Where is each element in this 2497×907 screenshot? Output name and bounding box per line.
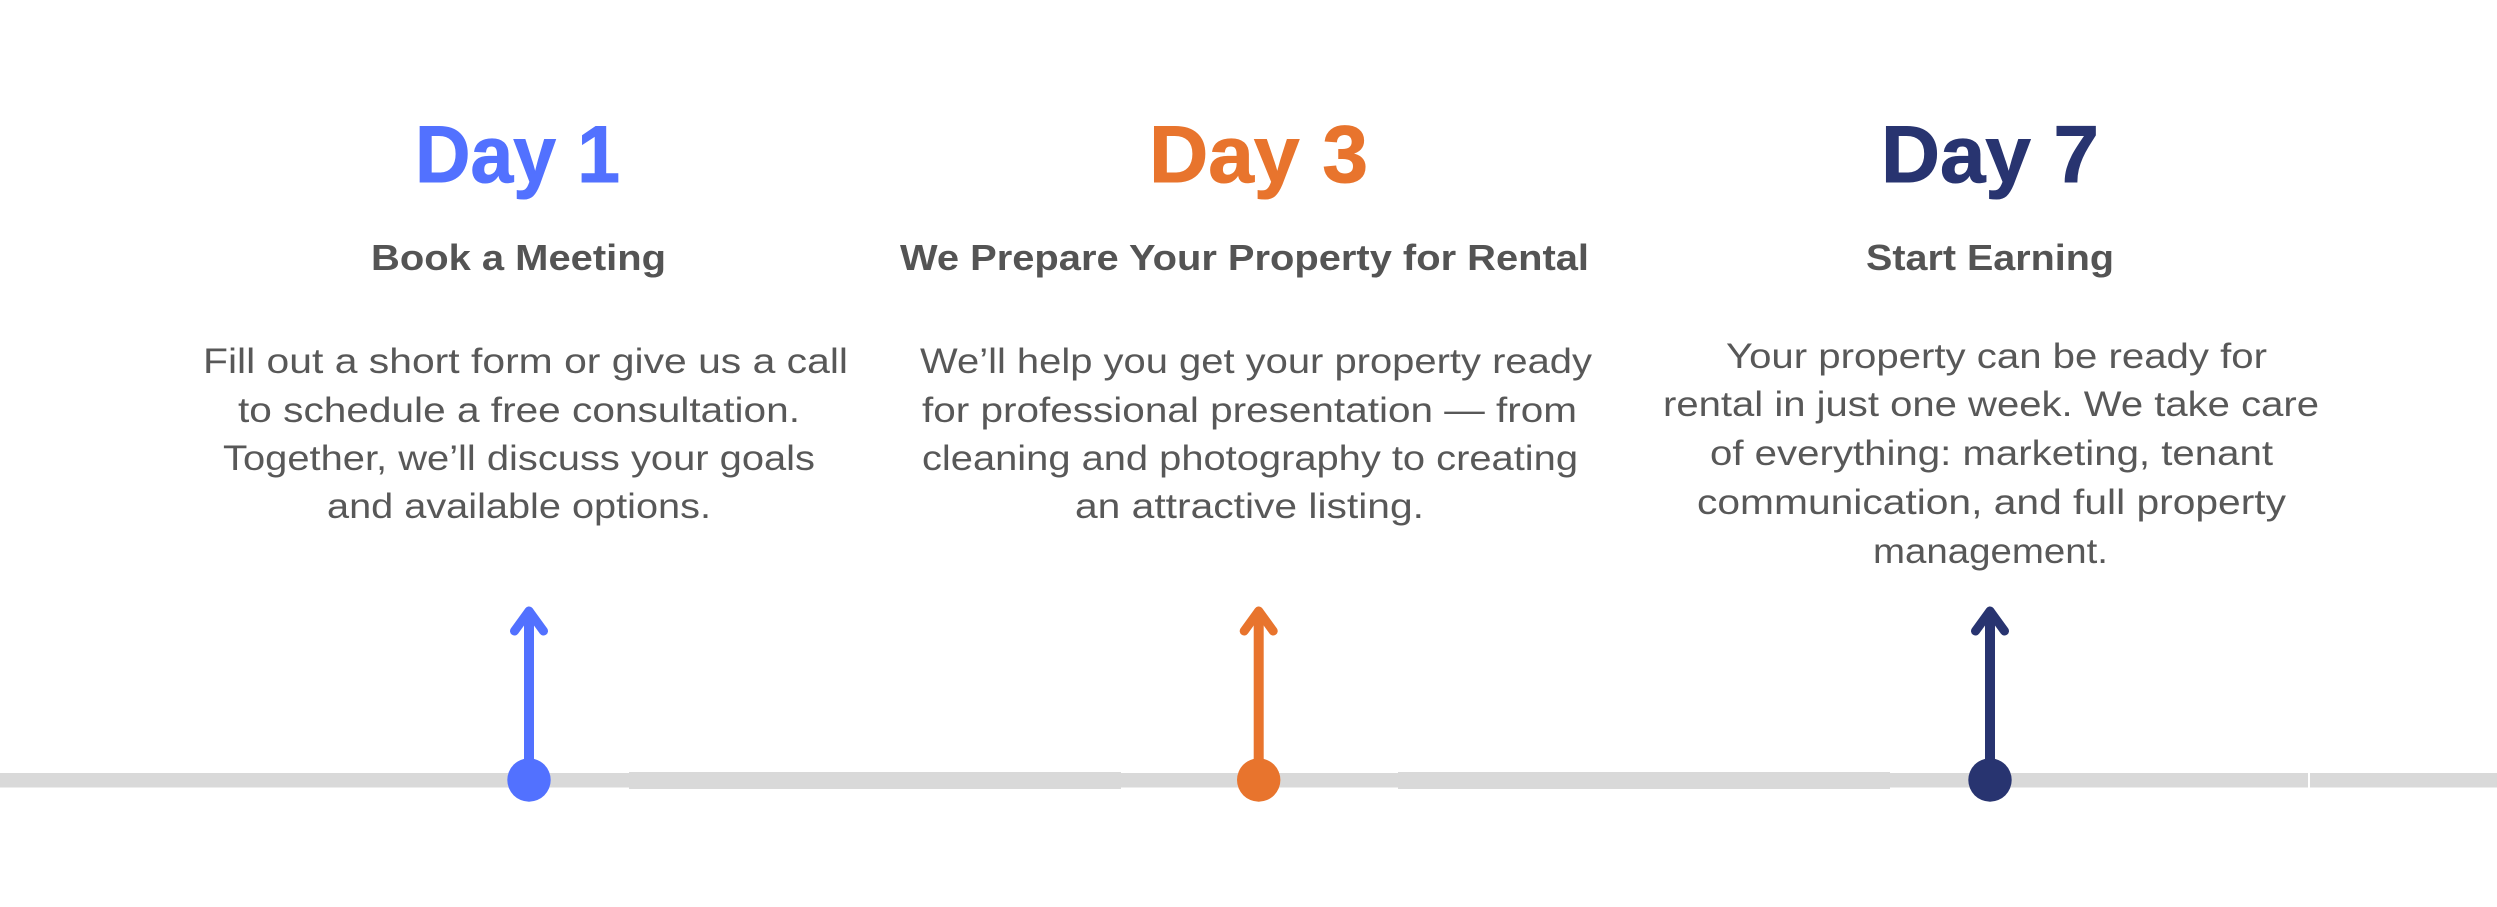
text block: day 7 description: communication, and full property xyxy=(1697,483,2287,522)
panel: day 1 xyxy=(203,110,848,802)
arrow: day 7 marker xyxy=(1968,611,2012,802)
subheading: book a meeting: Book a Meeting xyxy=(371,237,666,278)
subheading: start earning: Start Earning xyxy=(1866,237,2114,278)
text block: day 3 description: cleaning and photography to creating xyxy=(922,439,1578,478)
panel: day 3 xyxy=(900,110,1593,802)
text block: day 7 description: management. xyxy=(1873,532,2108,571)
text block: day 1 description: Together, we’ll discuss your goals xyxy=(223,439,815,478)
heading: day 1: Day 1 xyxy=(415,110,620,200)
text block: day 1 description: Fill out a short form or give us a call xyxy=(203,342,848,381)
arrow: day 1 marker xyxy=(507,611,551,802)
text block: day 7 description: Your property can be ready for xyxy=(1726,337,2267,376)
text block: day 3 description: We’ll help you get your property ready xyxy=(920,342,1593,381)
text block: day 3 description xyxy=(920,342,1593,526)
arrow: day 3 marker xyxy=(1237,611,1280,802)
text block: day 7 description xyxy=(1663,337,2319,571)
text block: day 7 description: rental in just one week. We take care xyxy=(1663,385,2319,424)
text block: day 3 description: for professional presentation — from xyxy=(922,391,1577,430)
heading: day 7: Day 7 xyxy=(1881,110,2099,200)
text block: day 1 description: to schedule a free consultation. xyxy=(238,391,800,430)
text block: day 3 description: an attractive listing. xyxy=(1075,487,1424,526)
timeline track xyxy=(0,772,2497,789)
heading: day 3: Day 3 xyxy=(1149,110,1368,200)
text block: day 7 description: of everything: marketing, tenant xyxy=(1710,434,2273,473)
text block: day 1 description: and available options. xyxy=(327,487,711,526)
subheading: we prepare your property for rental: We Prepare Your Property for Rental xyxy=(900,237,1589,278)
text block: day 1 description xyxy=(203,342,848,526)
panel: day 7 xyxy=(1663,110,2319,802)
